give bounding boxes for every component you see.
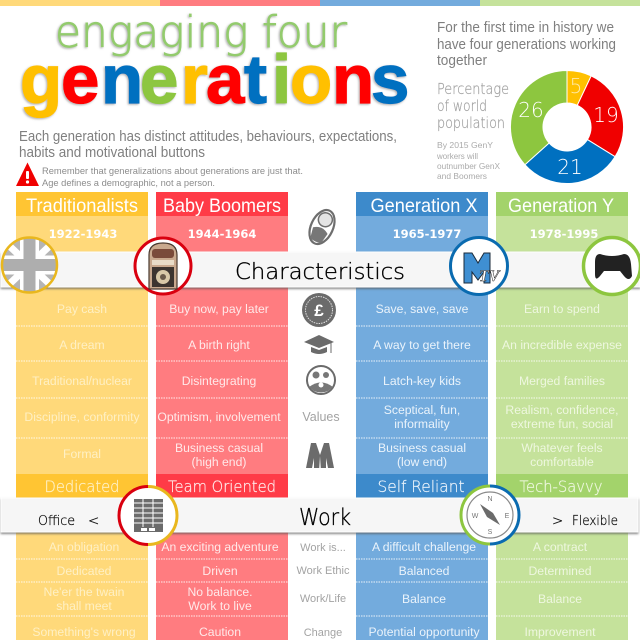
rows: A birth right [188,338,250,352]
column: Generation X [356,192,488,640]
band title: Work [299,505,351,531]
rows [502,302,622,639]
title line: generations: r [181,41,208,118]
icon: family [307,366,335,394]
rows: (high end) [192,455,246,469]
intro text right: together [437,53,487,69]
title line: generations: a [206,41,245,118]
header: Generation X [370,195,478,217]
rows: comfortable [530,455,594,469]
band title: Characteristics [235,260,405,285]
rows: Business casual [378,441,466,455]
work labels: Change [304,627,342,639]
icon: office building [119,486,177,544]
intro text right: have four generations working [437,37,616,53]
top colour stripe [0,0,640,6]
icon: game controller [584,238,640,294]
column: Traditionalists [16,192,148,640]
years: 1978-1995 [530,227,598,241]
title line: generations: e [140,41,178,118]
years: 1965-1977 [393,227,461,241]
icon: pound coin: £ [314,301,324,320]
icon: graduation cap [304,335,334,354]
title line: generations: i [272,41,291,118]
band: work [1,498,638,532]
title line: generations: e [61,41,99,118]
rows: A difficult challenge [372,540,476,554]
years: 1922-1943 [49,227,117,241]
rows: extreme fun, social [511,417,613,431]
icon: compass: N [487,496,493,503]
icon: compass: E [505,513,510,520]
column: Baby Boomers [156,192,288,640]
chart heading: population [437,114,505,132]
trait: Team Oriented [168,477,276,496]
donut chart: 26 [518,98,544,122]
icon: baby [304,206,340,248]
band: characteristics [1,252,640,287]
rows: Latch-key kids [383,374,461,388]
warning note: Age defines a demographic, not a person. [42,178,215,189]
rows: Formal [63,447,101,461]
icon: compass: W [472,513,479,520]
rows [157,302,281,639]
rows: Caution [199,625,241,639]
rows: A contract [533,540,588,554]
rows [368,302,480,639]
title [20,7,409,118]
scale right: > [552,513,563,529]
chart heading: of world [437,97,487,115]
work labels: Work/Life [300,593,346,605]
rows [24,302,140,639]
icon: compass [461,486,519,544]
icon: MTV logo [450,238,508,294]
rows: Buy now, pay later [169,302,269,316]
rows: Realism, confidence, [505,403,619,417]
rows: Balance [538,592,582,606]
rows: Discipline, conformity [24,410,140,424]
rows: Determined [528,564,592,578]
rows: Earn to spend [524,302,600,316]
rows: An exciting adventure [161,540,279,554]
intro text right: For the first time in history we [437,20,614,36]
rows: Improvement [524,625,596,639]
donut chart [510,70,624,184]
chart note: and Boomers [437,171,487,181]
title line: engaging four: engaging four [55,7,348,58]
rows: Ne'er the twain [44,585,124,599]
title line: generations: t [244,41,267,118]
icon: MTV logo: TV [479,268,501,285]
title line: generations: g [20,41,62,118]
title line: generations: s [371,41,409,118]
band: work: < [88,513,99,529]
rows: Driven [202,564,238,578]
label: values: Values [302,410,340,424]
years: 1944-1964 [188,227,256,241]
rows: Balance [402,592,446,606]
icon: pound coin [302,293,336,327]
chart note: workers will [436,151,478,161]
icon: union flag [0,236,59,294]
intro text: Each generation has distinct attitudes, behaviours, expectations, [19,129,397,145]
column: Generation Y [496,192,628,640]
rows: No balance. [187,585,253,599]
scale left: Office [38,513,75,529]
rows: Something's wrong [32,625,136,639]
work labels: Work is... [300,542,346,554]
rows: Sceptical, fun, [384,403,460,417]
rows: Work to live [188,599,252,613]
title line: generations: n [332,41,374,118]
rows: Merged families [519,374,605,388]
icon: jukebox [135,238,191,294]
title line: generations: n [101,41,143,118]
rows: Save, save, save [376,302,469,316]
header: Traditionalists [26,195,138,217]
rows: Disintegrating [182,374,256,388]
rows: informality [394,417,451,431]
header: Baby Boomers [163,195,281,217]
band: work: Flexible [572,513,618,529]
chart heading: Percentage [437,80,509,98]
rows: Optimism, involvement [157,410,281,424]
trait: Dedicated [44,477,120,496]
warning note: Remember that generalizations about generations are just that. [42,166,303,177]
rows: An obligation [49,540,119,554]
rows: An incredible expense [502,338,622,352]
trait: Self Reliant [378,477,464,496]
rows: Balanced [399,564,449,578]
donut chart: 5 [570,74,582,98]
rows: A dream [59,338,105,352]
intro text: habits and motivational buttons [19,145,205,161]
donut chart: 21 [557,155,583,179]
rows: Whatever feels [521,441,603,455]
rows: Pay cash [57,302,107,316]
rows: Business casual [175,441,263,455]
icon: jacket [306,443,334,468]
trait: Tech-Savvy [520,477,602,496]
rows: (low end) [397,455,447,469]
chart note: By 2015 GenY [437,140,493,150]
rows: Traditional/nuclear [32,374,132,388]
work labels: Work Ethic [297,565,350,577]
header: Generation Y [508,195,614,217]
work labels [297,542,350,639]
icon: warning triangle [16,162,39,186]
chart note: outnumber GenX [437,161,500,171]
rows: A way to get there [373,338,471,352]
donut chart: 19 [593,103,619,127]
icon: compass: S [488,529,493,536]
rows: shall meet [56,599,112,613]
rows: Dedicated [57,564,111,578]
rows: Potential opportunity [368,625,480,639]
title line: generations: o [290,41,332,118]
